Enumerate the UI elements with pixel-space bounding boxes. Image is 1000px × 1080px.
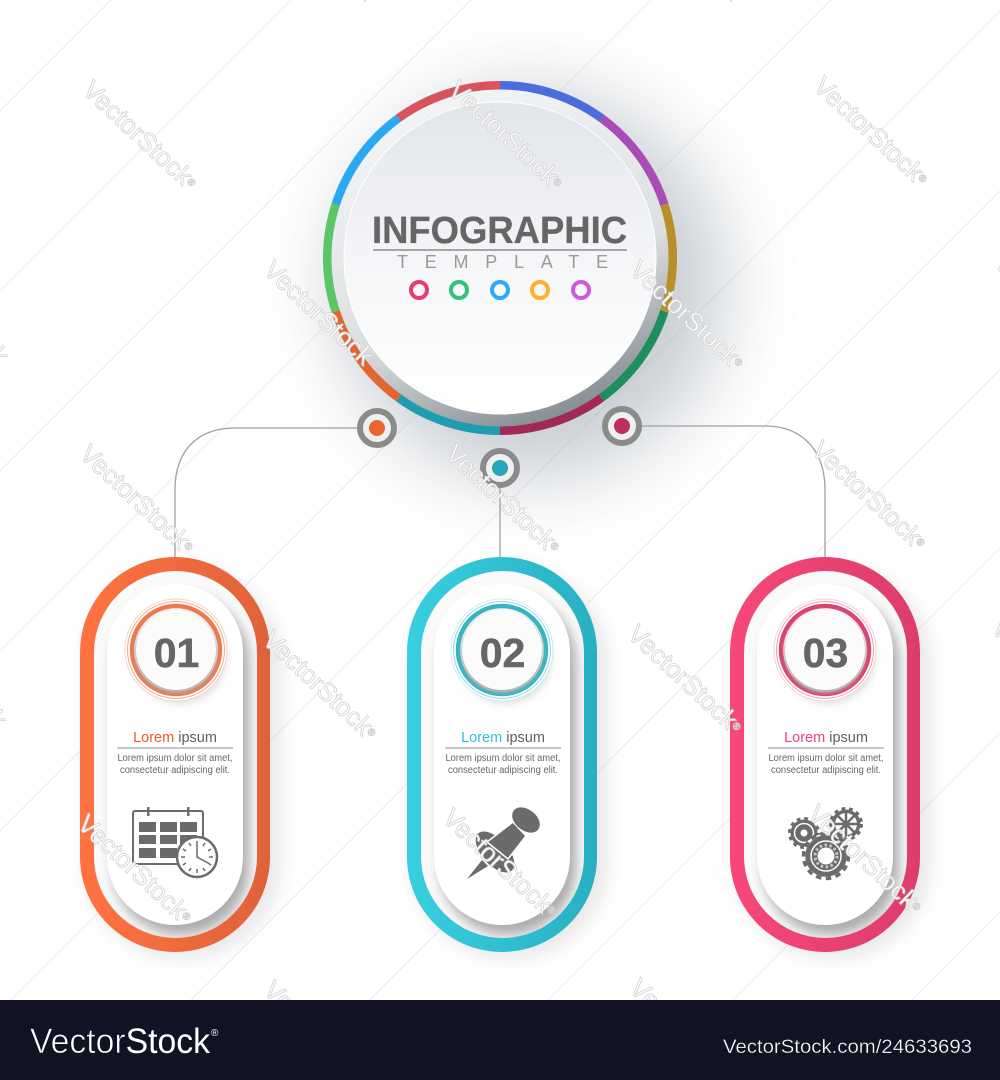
watermarks: ® xyxy=(182,540,195,554)
watermarks: ® xyxy=(732,356,745,370)
watermarks: VectorStock xyxy=(440,438,562,555)
text 03: Lorem ipsum dolor sit amet, xyxy=(768,753,884,764)
watermarks: ® xyxy=(914,536,927,550)
watermarks: ® xyxy=(366,356,379,370)
shadow of main circle xyxy=(335,90,725,480)
panel: 02 xyxy=(407,557,609,960)
connector lines xyxy=(175,426,825,557)
watermarks: VectorStock xyxy=(624,254,746,371)
icon: gears xyxy=(790,808,862,878)
number badge 01 xyxy=(125,599,227,704)
watermarks: VectorStock xyxy=(74,438,196,555)
watermarks: VectorStock xyxy=(622,618,744,735)
node: crimson xyxy=(605,409,639,443)
watermarks: ® xyxy=(548,540,561,554)
text 03: consectetur adipiscing elit. xyxy=(771,765,881,776)
heading 02 xyxy=(445,730,561,748)
footer bar xyxy=(0,1000,1000,1080)
footer url: VectorStock.com/24633693 xyxy=(723,1037,972,1058)
text 02: Lorem ipsum dolor sit amet, xyxy=(446,753,560,764)
text 01: Lorem ipsum dolor sit amet, xyxy=(118,753,232,764)
text 01 xyxy=(118,753,232,776)
node: orange xyxy=(360,411,394,445)
watermarks: VectorStock xyxy=(257,624,379,741)
watermarks: VectorStock xyxy=(443,74,565,191)
watermarks: ® xyxy=(910,900,923,914)
heading 03: Lorem ipsum xyxy=(784,730,868,746)
watermarks: VectorStock xyxy=(72,808,194,925)
main circle xyxy=(327,85,673,431)
heading 01: Lorem ipsum xyxy=(133,730,217,746)
watermarks: ® xyxy=(730,720,743,734)
title xyxy=(372,210,627,272)
title: INFOGRAPHIC xyxy=(372,210,627,252)
watermarks: VectorStock xyxy=(437,802,559,919)
number badge 03: 03 xyxy=(803,630,848,676)
watermarks: VectorStock xyxy=(802,798,924,915)
registered mark: ® xyxy=(211,1028,219,1039)
text 02 xyxy=(446,753,560,776)
coloured ring xyxy=(327,85,673,431)
title: TEMPLATE xyxy=(397,252,608,272)
heading 01 xyxy=(117,730,233,748)
white disc xyxy=(344,102,656,414)
number badge 03 xyxy=(774,599,876,704)
watermarks: VectorStock xyxy=(77,74,199,191)
panel: 01 xyxy=(80,557,282,960)
coloured dots xyxy=(411,282,589,298)
panel: 03 xyxy=(730,557,932,960)
number badge 02 xyxy=(451,599,553,704)
heading 03 xyxy=(768,730,884,748)
watermarks: VectorStock xyxy=(808,70,930,187)
watermarks: ® xyxy=(365,726,378,740)
text 03 xyxy=(768,753,884,776)
text 02: consectetur adipiscing elit. xyxy=(448,765,558,776)
watermarks: ® xyxy=(185,176,198,190)
text 01: consectetur adipiscing elit. xyxy=(120,765,230,776)
icon: push pin xyxy=(467,802,545,879)
footer logo: VectorStock xyxy=(30,1022,210,1061)
number badge 02: 02 xyxy=(480,630,525,676)
heading 02: Lorem ipsum xyxy=(461,730,545,746)
number badge 01: 01 xyxy=(154,630,199,676)
watermarks: ® xyxy=(916,172,929,186)
watermarks: VectorStock xyxy=(258,254,380,371)
icon: calendar and clock xyxy=(133,807,217,877)
watermarks: ® xyxy=(551,176,564,190)
watermarks: VectorStock xyxy=(806,434,928,551)
watermarks: ® xyxy=(545,904,558,918)
watermarks: ® xyxy=(180,910,193,924)
bevel ring xyxy=(332,90,668,426)
node: teal xyxy=(483,451,517,485)
